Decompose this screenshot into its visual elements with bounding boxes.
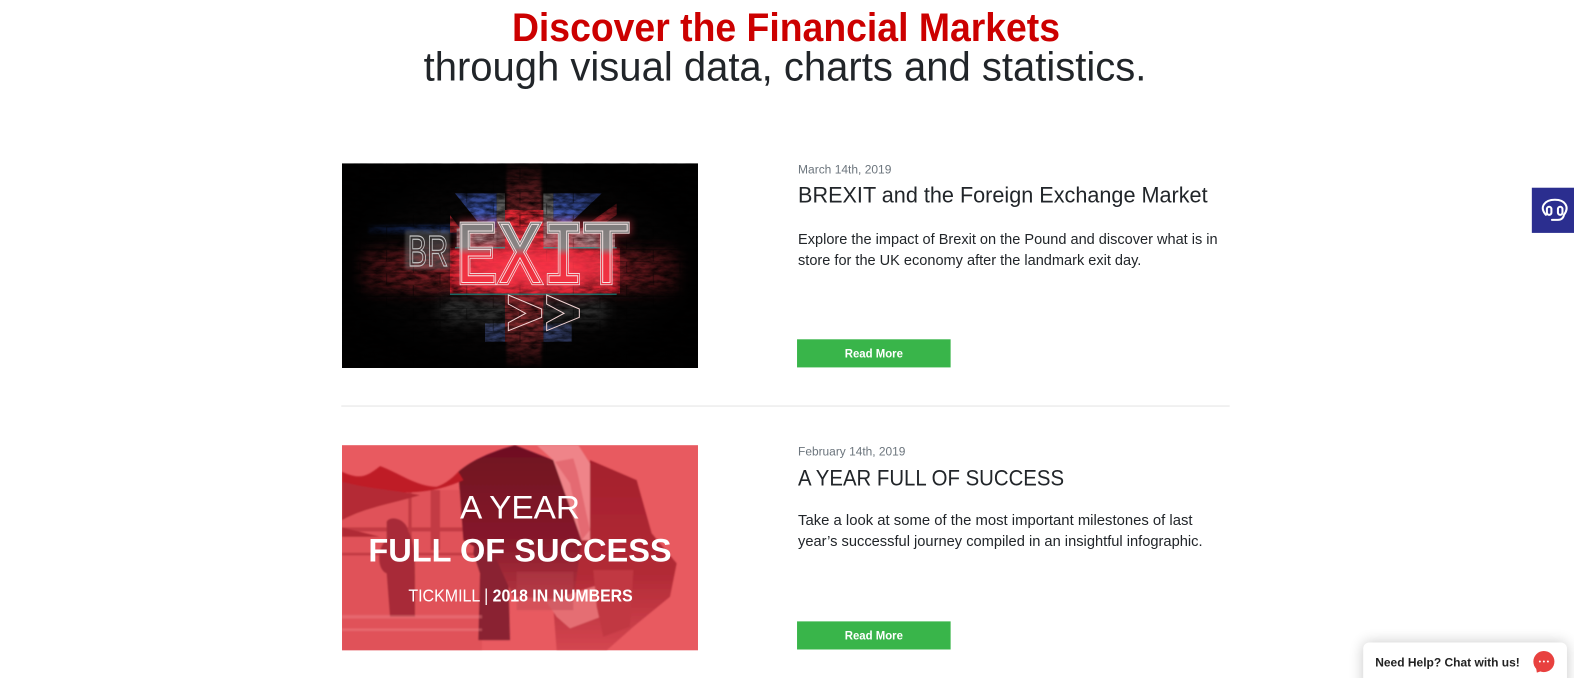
neon text: EXIT: T (583, 210, 630, 310)
description (798, 513, 1203, 550)
chat widget (1363, 642, 1567, 678)
neon text: EXIT: E (456, 209, 498, 309)
window frame (342, 490, 474, 556)
neon text: EXIT: X (499, 210, 541, 310)
banner text: 2018 IN NUMBERS (493, 586, 633, 606)
neon text: EXIT: E (456, 209, 498, 309)
button: read more: Read More (845, 628, 903, 642)
neon text: EXIT: T (583, 210, 630, 310)
neon text: EXIT: X (499, 210, 541, 310)
heading: BREXIT and the Foreign Exchange Market (798, 182, 1208, 207)
neon text: BR (405, 228, 450, 276)
neon text: EXIT: I (542, 210, 585, 310)
neon text: EXIT: I (542, 210, 585, 310)
neon text: EXIT (453, 215, 636, 292)
banner text: TICKMILL | (408, 586, 488, 606)
subtitle line: through visual data, charts and statistics. (424, 43, 1146, 89)
suit jacket (553, 460, 677, 650)
banner text: FULL OF SUCCESS (368, 533, 672, 569)
neon text: EXIT: T (583, 210, 630, 310)
article: A Year Full of Success (342, 445, 1203, 650)
date: February 14th, 2019 (798, 445, 906, 459)
shirt and tie (537, 445, 590, 540)
heading: A YEAR FULL OF SUCCESS (798, 465, 1064, 490)
title line: Discover the Financial Markets: Discover the Financial Markets (512, 5, 1060, 50)
neon text: EXIT: T (583, 210, 630, 310)
banner text (368, 489, 672, 606)
neon text: BR: BR (408, 228, 448, 276)
neon text: EXIT: I (542, 210, 585, 310)
date: March 14th, 2019 (798, 163, 892, 177)
description: year’s successful journey compiled in an insightful infographic. (798, 534, 1203, 550)
neon text: EXIT: E (456, 209, 498, 309)
neon text: EXIT: I (542, 210, 585, 310)
image: A Year Full of Success banner (342, 445, 698, 650)
banner scene (342, 445, 677, 650)
description (798, 232, 1218, 269)
chat text: Need Help? Chat with us! (1375, 656, 1520, 670)
neon text: EXIT: E (456, 209, 498, 309)
button: read more (797, 621, 951, 649)
title (424, 5, 1146, 89)
neon text: EXIT: X (499, 210, 541, 310)
button: read more (797, 339, 951, 367)
silhouette: colleagues (379, 517, 510, 640)
image: Brexit neon sign on brick wall (342, 163, 698, 368)
article: Brexit (342, 163, 1218, 368)
icon: chat bubble (1533, 651, 1554, 673)
icon: neon double chevrons (508, 295, 579, 331)
flag on wall (360, 250, 680, 292)
crossed arms (548, 586, 600, 629)
red cape (342, 466, 463, 493)
description: store for the UK economy after the landmark exit day. (798, 253, 1141, 269)
neon text: EXIT: X (499, 210, 541, 310)
description: Explore the impact of Brexit on the Pound and discover what is in (798, 232, 1218, 248)
description: Take a look at some of the most important milestones of last (798, 513, 1193, 529)
button: read more: Read More (845, 346, 903, 360)
banner text: A YEAR (460, 489, 580, 525)
icon: support headset tab (1532, 188, 1574, 233)
